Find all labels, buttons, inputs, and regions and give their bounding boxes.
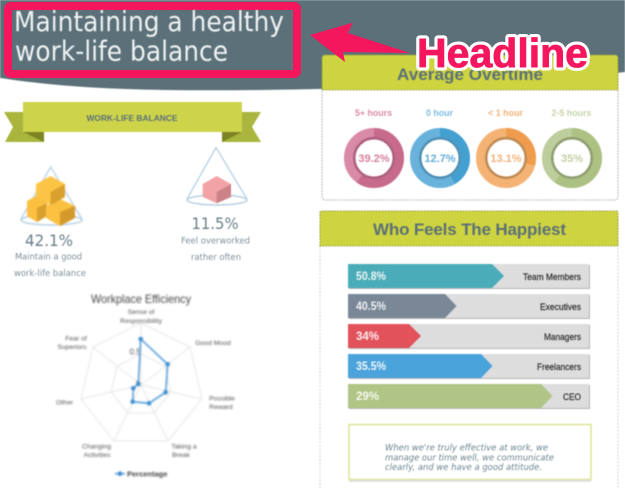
radar axis labels: Taking a xyxy=(171,444,197,450)
bar: ceo xyxy=(348,384,590,409)
radar grid xyxy=(81,323,202,441)
stat: 11.5%: rather often xyxy=(191,253,241,263)
radar axis labels: Other xyxy=(56,400,74,406)
bar: managers: 34% xyxy=(356,331,379,343)
donut: 0 hour: 12.7% xyxy=(424,153,456,165)
donut: 2-5 hours xyxy=(546,108,598,184)
donut: less than 1 hour: < 1 hour xyxy=(488,108,523,119)
bar: team members: Team Members xyxy=(523,272,581,283)
stat: 42.1%: 42.1% xyxy=(25,231,73,250)
panel: average overtime xyxy=(322,55,618,200)
radar axis labels: 0.5 xyxy=(129,348,141,356)
ribbon banner: WORK-LIFE BALANCE xyxy=(86,113,178,123)
radar axis labels: Reward xyxy=(209,404,233,411)
stat: 11.5% xyxy=(181,214,250,263)
bar: freelancers: Freelancers xyxy=(537,362,581,373)
bar: team members xyxy=(348,264,590,289)
arrow: pointing to headline xyxy=(310,23,410,62)
icon: cone with pink cube xyxy=(187,148,247,205)
quote box: manage our time well, we communicate xyxy=(385,454,554,464)
bar: executives: Executives xyxy=(540,302,581,313)
radar axis labels: 0 xyxy=(136,380,140,387)
stat: 11.5%: Feel overworked xyxy=(181,236,250,246)
stat: 42.1%: Maintain a good xyxy=(15,252,82,262)
donut: 2-5 hours: 35% xyxy=(561,153,583,165)
panel header: who feels the happiest xyxy=(320,211,618,246)
stat: 11.5%: 11.5% xyxy=(192,214,238,233)
donut: 5+ hours xyxy=(348,108,400,184)
annotation label: headline: Headline xyxy=(417,30,588,76)
bar: team members: 50.8% xyxy=(356,271,386,283)
title xyxy=(14,5,284,68)
callout: red highlight box xyxy=(8,6,297,74)
radar axis labels: Fear of xyxy=(65,336,87,342)
radar axis labels: Break xyxy=(172,452,190,459)
radar axis labels: Superiors xyxy=(57,344,87,351)
quote box xyxy=(349,424,591,481)
header background xyxy=(0,0,625,90)
annotation label: headline: Headline xyxy=(417,30,588,76)
donut: less than 1 hour xyxy=(480,108,532,184)
bar: freelancers xyxy=(348,354,590,379)
heading: who feels the happiest: Who Feels The Happiest xyxy=(373,220,566,239)
donut: 0 hour xyxy=(414,108,466,184)
stat: 42.1%: work-life balance xyxy=(14,269,86,279)
radar axis labels: Responsibility xyxy=(120,318,163,325)
radar axis labels xyxy=(56,309,235,459)
radar axis labels: Possible xyxy=(209,396,235,402)
radar axis labels: Activities xyxy=(84,452,111,459)
stat: 42.1% xyxy=(14,231,86,279)
bar: executives xyxy=(348,294,590,319)
title: work-life balance xyxy=(15,34,228,68)
quote box: When we're truly effective at work, we xyxy=(385,444,548,454)
radar axis labels: Sense of xyxy=(128,309,155,316)
bar: ceo: CEO xyxy=(563,392,581,403)
icon: cone with stacked yellow cubes xyxy=(21,167,82,226)
donut: less than 1 hour: 13.1% xyxy=(490,153,522,165)
donut: 2-5 hours: 2-5 hours xyxy=(552,108,592,119)
radar axis labels: Changing xyxy=(82,444,111,450)
title: Maintaining a healthy xyxy=(14,5,284,38)
donut: 0 hour: 0 hour xyxy=(426,108,453,119)
chart title: Workplace Efficiency xyxy=(91,292,191,306)
quote box: clearly, and we have a good attitude. xyxy=(385,463,542,473)
panel: who feels the happiest xyxy=(320,211,618,488)
bar: ceo: 29% xyxy=(356,391,379,403)
radar axis labels: Good Mood xyxy=(195,340,231,347)
bar: managers: Managers xyxy=(544,332,581,343)
panel header: average overtime xyxy=(322,55,618,90)
bar: managers xyxy=(348,324,590,349)
radar chart: workplace efficiency xyxy=(56,292,235,478)
donut: 5+ hours: 5+ hours xyxy=(355,108,392,119)
bar: freelancers: 35.5% xyxy=(356,361,386,373)
donut: 5+ hours: 39.2% xyxy=(358,153,390,165)
radar data series xyxy=(130,337,170,406)
bar: executives: 40.5% xyxy=(356,301,386,313)
radar legend: Percentage xyxy=(127,470,167,478)
ribbon banner xyxy=(4,102,261,142)
heading: average overtime: Average Overtime xyxy=(397,65,543,84)
